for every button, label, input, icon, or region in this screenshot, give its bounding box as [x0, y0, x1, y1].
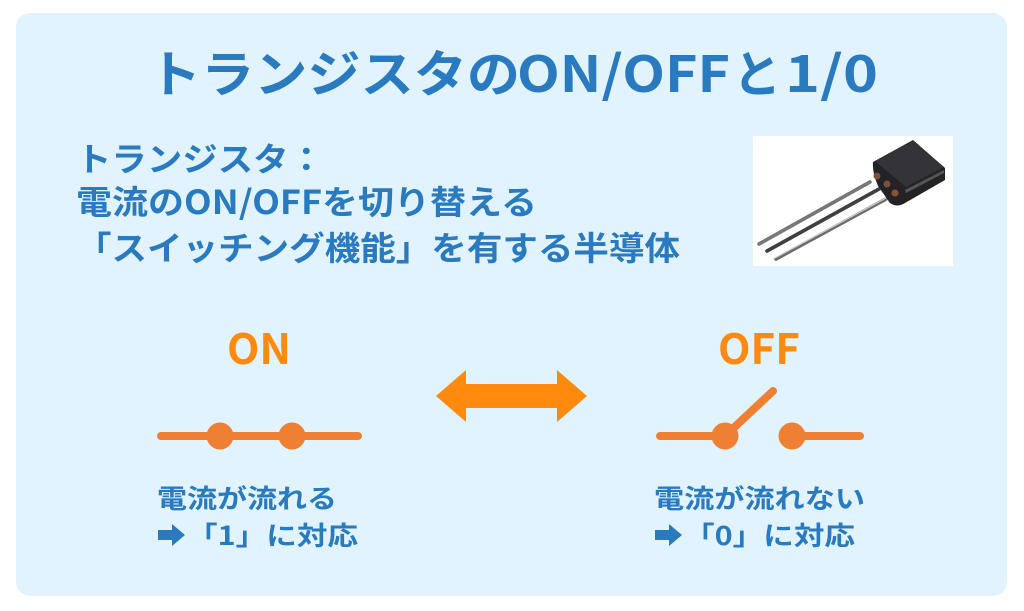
text block: OFF description: 「0」に対応	[684, 516, 855, 553]
text block: ON description	[157, 479, 358, 553]
heading: ON: ON	[227, 316, 291, 377]
icon: open switch	[660, 391, 860, 450]
photo: transistor	[753, 136, 953, 266]
text block: OFF description: 電流が流れない	[654, 479, 865, 516]
title	[148, 35, 878, 107]
icon: small arrow	[655, 524, 682, 546]
icon: closed switch	[161, 422, 358, 450]
text block: OFF description	[654, 479, 865, 553]
text block: ON description: 電流が流れる	[157, 479, 337, 516]
transistor body	[873, 140, 945, 206]
heading: OFF: OFF	[718, 316, 800, 377]
text block: transistor definition: 「スイッチング機能」を有する半導体	[76, 222, 680, 270]
text block: transistor definition	[76, 133, 680, 270]
title: トランジスタの	[148, 35, 520, 107]
title: と	[733, 35, 781, 107]
title: 1/0	[785, 35, 878, 107]
leads	[759, 182, 886, 259]
title: ON/OFF	[517, 35, 730, 107]
arrow: double-headed	[436, 370, 587, 422]
text block: transistor definition: トランジスタ：	[76, 133, 324, 181]
text block: ON description: 「1」に対応	[187, 516, 358, 553]
icon: small arrow	[158, 524, 185, 546]
text block: transistor definition: 電流のON/OFFを切り替える	[76, 176, 537, 224]
